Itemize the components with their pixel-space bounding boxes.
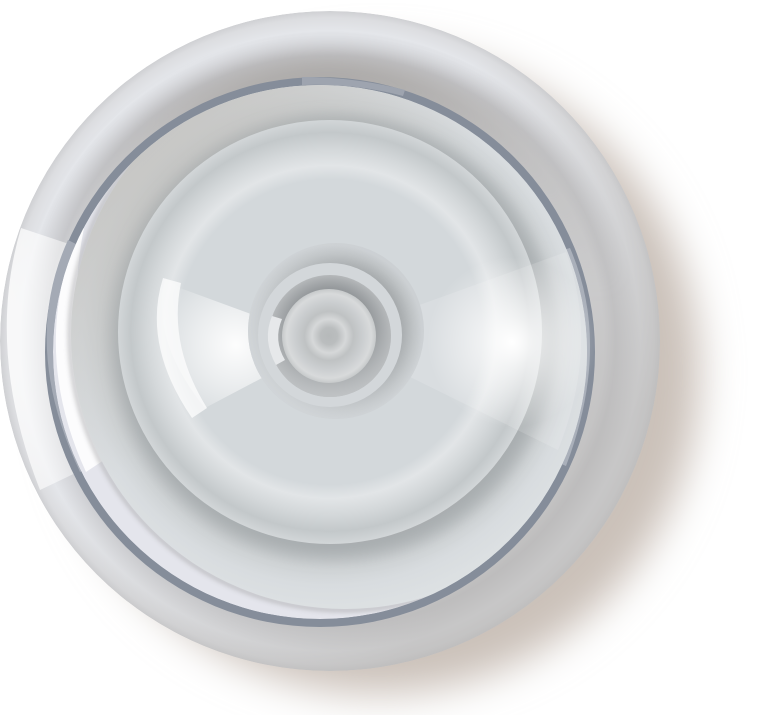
- hub dark ring: [269, 275, 391, 397]
- white crescent: [56, 228, 102, 472]
- outer rim: [0, 11, 660, 671]
- ring light segment: right: [559, 248, 590, 466]
- dish edge shadow: [66, 164, 425, 614]
- hub light ring: [258, 263, 402, 407]
- light fan: left: [162, 278, 262, 408]
- ring light segment: left: [47, 240, 88, 472]
- rim top shading: [72, 46, 577, 231]
- dark groove ring: [45, 77, 595, 627]
- glow: right: [427, 257, 597, 427]
- hub glint: [268, 316, 285, 365]
- rim highlight: left: [6, 228, 74, 490]
- rim bottom shading: [115, 118, 660, 671]
- inner plate: [118, 120, 542, 544]
- hub: [248, 243, 424, 419]
- hub outer shadow ring: [248, 243, 424, 419]
- drop shadow: [56, 50, 700, 694]
- white glint: left arc: [157, 278, 207, 418]
- hub centre: [282, 289, 376, 383]
- light fan: right: [400, 252, 581, 450]
- plate shadow: [114, 117, 554, 557]
- inner dish: [53, 85, 587, 619]
- ring light segment: top: [302, 77, 405, 96]
